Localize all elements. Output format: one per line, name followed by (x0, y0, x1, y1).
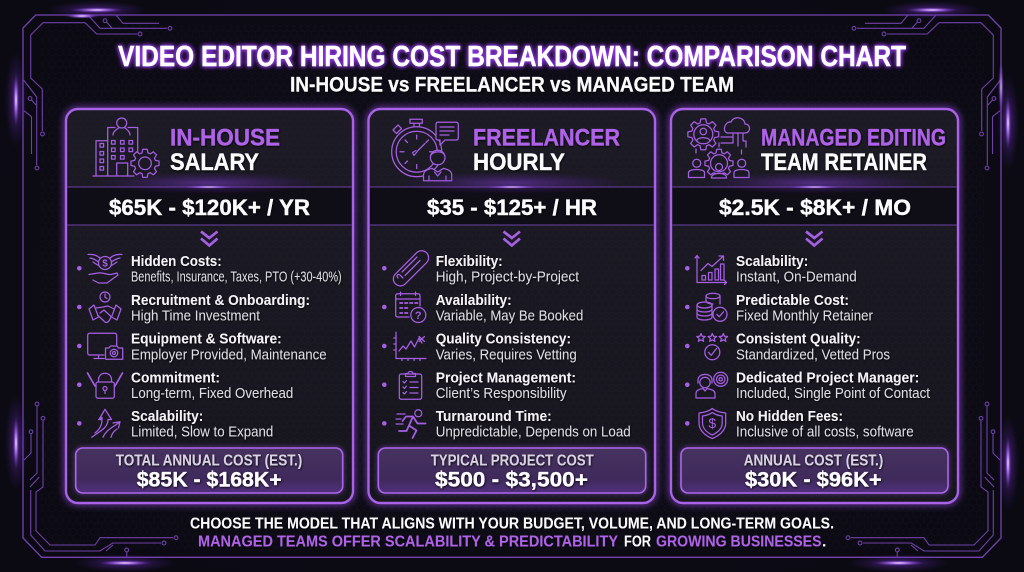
item: project management: Client’s Responsibility (436, 386, 567, 402)
item: no hidden fees: No Hidden Fees: (736, 409, 843, 425)
icon: calendar with question mark (396, 292, 426, 322)
item: turnaround time: Unpredictable, Depends on Load (436, 425, 631, 441)
frame: right half circuitry (512, 15, 1001, 557)
icon: clock and handshake (89, 292, 121, 322)
heading: managed editing team retainer: MANAGED EDITING (761, 125, 946, 152)
icon: running figure (396, 410, 426, 438)
item: availability (382, 292, 583, 325)
heading: freelancer hourly (473, 125, 620, 176)
icon: coin stack with check (697, 293, 727, 321)
icon: rising arrows (92, 409, 120, 437)
item: commitment (77, 370, 293, 402)
icon: clipboard checklist (399, 371, 422, 399)
icon: three stars with check (697, 334, 728, 360)
price band: $35 - $125+ / HR (427, 195, 597, 220)
footer message: MANAGED TEAMS OFFER SCALABILITY & PREDICTABILITY (198, 534, 619, 551)
price band (672, 172, 956, 225)
item: turnaround time (382, 409, 631, 441)
cost box: typical project cost: TYPICAL PROJECT COST (431, 453, 594, 470)
item: commitment: Commitment: (131, 370, 220, 386)
cost box: annual cost: $30K - $96K+ (745, 468, 882, 492)
item: equipment and software (77, 331, 327, 363)
icon: office building with person and gear (93, 118, 159, 177)
item: recruitment and onboarding: Recruitment & Onboarding: (131, 293, 310, 309)
icon: chevrons down (806, 232, 822, 246)
cost box: total annual cost: $85K - $168K+ (137, 468, 282, 492)
item: scalability: Instant, On-Demand (736, 270, 857, 286)
panel: in-house salary (66, 109, 353, 503)
item: equipment and software: Equipment & Software: (131, 331, 282, 347)
price band: $2.5K - $8K+ / MO (719, 195, 911, 220)
item: predictable cost: Fixed Monthly Retainer (736, 309, 873, 325)
item: equipment and software: Employer Provided, Maintenance (131, 347, 327, 363)
item: scalability (685, 254, 857, 286)
icon: shield with dollar: $ (708, 415, 716, 431)
heading: freelancer hourly: FREELANCER (473, 125, 620, 152)
icon: gears, cloud and team (688, 118, 750, 178)
cost box: total annual cost: TOTAL ANNUAL COST (EST.) (116, 453, 302, 470)
item: predictable cost (685, 293, 873, 325)
cost box: annual cost (681, 448, 948, 493)
icon: safety pin (390, 248, 432, 289)
icon: calendar with question mark: ? (415, 310, 422, 322)
item: flexibility: Flexibility: (436, 254, 503, 270)
price band (370, 172, 654, 225)
item: scalability (77, 409, 273, 441)
cost box: annual cost: ANNUAL COST (EST.) (744, 453, 883, 470)
item: quality consistency (382, 331, 577, 363)
item: hidden costs: Benefits, Insurance, Taxes, PTO (+30-40%) (131, 270, 342, 286)
icon: winged coin and hand: $ (102, 258, 108, 270)
cost box: typical project cost (378, 448, 646, 493)
icon: stopwatch, chat bubble and person (392, 119, 458, 181)
item: consistent quality: Consistent Quality: (736, 331, 861, 347)
item: project management: Project Management: (436, 370, 576, 386)
item: dedicated project manager: Included, Single Point of Contact (736, 386, 930, 402)
item: flexibility (382, 248, 579, 289)
title: VIDEO EDITOR HIRING COST BREAKDOWN: COMPARISON CHART (118, 41, 906, 73)
item: commitment: Long-term, Fixed Overhead (131, 386, 293, 402)
item: flexibility: High, Project-by-Project (436, 270, 579, 286)
footer message: . (822, 534, 826, 551)
heading: in-house salary: SALARY (170, 149, 259, 176)
icon: winged coin and hand (88, 254, 122, 283)
item: quality consistency: Quality Consistency: (436, 331, 571, 347)
heading: freelancer hourly: HOURLY (473, 149, 565, 176)
item: recruitment and onboarding: High Time Investment (131, 309, 260, 325)
icon: headset manager with target (696, 372, 728, 398)
item: scalability: Limited, Slow to Expand (131, 425, 273, 441)
frame: left half circuitry (23, 15, 512, 557)
item: turnaround time: Turnaround Time: (436, 409, 552, 425)
icon: erratic line chart (394, 332, 426, 360)
item: consistent quality: Standardized, Vetted Pros (736, 347, 890, 363)
panel: freelancer hourly (368, 109, 655, 503)
icon: padlock with chains (88, 373, 122, 398)
heading: managed editing team retainer: TEAM RETAINER (761, 149, 927, 176)
icon: shield with dollar (699, 408, 726, 438)
item: recruitment and onboarding (77, 292, 310, 325)
item: availability: Variable, May Be Booked (436, 309, 583, 325)
footer message: GROWING BUSINESSES (656, 534, 822, 551)
item: quality consistency: Varies, Requires Vetting (436, 347, 577, 363)
item: availability: Availability: (436, 293, 512, 309)
heading: managed editing team retainer (761, 125, 946, 176)
cost box: total annual cost (76, 448, 343, 493)
item: consistent quality (685, 331, 890, 363)
item: hidden costs: Hidden Costs: (131, 254, 222, 270)
icon: growing bar chart (695, 256, 726, 284)
icon: chevrons down (504, 232, 520, 246)
price band (68, 172, 352, 225)
item: dedicated project manager (685, 370, 930, 402)
item: no hidden fees: Inclusive of all costs, software (736, 425, 914, 441)
icon: chevrons down (201, 232, 218, 246)
item: no hidden fees (685, 408, 914, 441)
item: hidden costs (77, 254, 342, 286)
panel: managed editing team retainer (671, 109, 958, 503)
heading: in-house salary: IN-HOUSE (170, 125, 280, 152)
item: dedicated project manager: Dedicated Project Manager: (736, 370, 919, 386)
cost box: typical project cost: $500 - $3,500+ (435, 468, 588, 492)
footer message: FOR (624, 534, 651, 551)
item: predictable cost: Predictable Cost: (736, 293, 849, 309)
footer message: CHOOSE THE MODEL THAT ALIGNS WITH YOUR BUDGET, VOLUME, AND LONG-TERM GOALS. (190, 515, 834, 532)
item: scalability: Scalability: (131, 409, 203, 425)
item: scalability: Scalability: (736, 254, 808, 270)
item: project management (382, 370, 576, 402)
heading: in-house salary (170, 125, 280, 176)
footer message (190, 515, 834, 551)
price band: $65K - $120K+ / YR (109, 195, 310, 220)
icon: monitor and camera (88, 333, 123, 359)
subtitle: IN-HOUSE vs FREELANCER vs MANAGED TEAM (290, 73, 734, 97)
